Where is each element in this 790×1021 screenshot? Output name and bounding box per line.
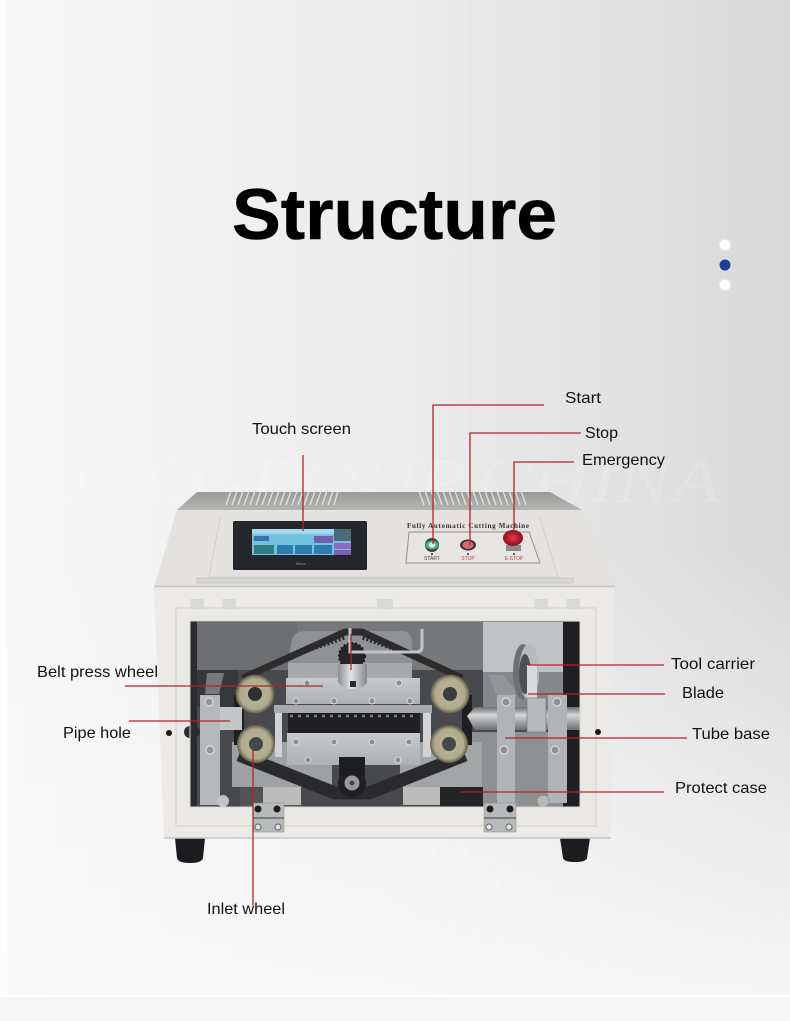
control panel: Fully Automatic Cutting Machine	[407, 522, 529, 530]
timing belt	[239, 632, 467, 793]
tool carrier, blade and tube base	[467, 644, 580, 807]
label: Inlet wheel: Inlet wheel	[207, 901, 285, 918]
line: blade	[528, 693, 665, 695]
line: touch screen	[302, 455, 304, 531]
label: Tool carrier: Tool carrier	[671, 656, 756, 673]
transparent window interior	[184, 621, 580, 807]
line: stop	[470, 433, 581, 545]
door screw holes	[166, 729, 601, 736]
line: emergency	[514, 462, 574, 532]
label: Protect case: Protect case	[675, 780, 767, 797]
machine front body	[154, 587, 615, 838]
touch screen: Kinco	[296, 561, 307, 566]
control panel	[406, 522, 540, 563]
label: Touch screen: Touch screen	[252, 421, 351, 438]
label: Belt press wheel: Belt press wheel	[37, 664, 158, 681]
line: belt press wheel	[125, 685, 323, 687]
line: tool carrier	[528, 664, 664, 666]
top pulley and hook	[338, 628, 422, 689]
label: Pipe hole: Pipe hole	[63, 725, 131, 742]
line: tube base	[505, 737, 687, 739]
door frame	[176, 608, 596, 826]
title: Structure	[232, 176, 557, 255]
machine feet	[175, 838, 590, 863]
label: Tube base: Tube base	[692, 726, 770, 743]
machine	[37, 390, 770, 918]
stop button: STOP	[461, 556, 475, 562]
line: inlet wheel	[252, 750, 254, 905]
bottom pulley	[338, 757, 366, 797]
pagination dots	[720, 240, 730, 290]
label: Stop: Stop	[585, 425, 618, 442]
line: pipe hole	[129, 720, 230, 722]
left hinge	[253, 803, 284, 832]
callout lines	[125, 405, 687, 905]
start button: START	[424, 556, 440, 562]
emergency stop button: E-STOP	[505, 556, 524, 562]
inlet wheels	[237, 725, 468, 763]
line: protect case	[461, 791, 664, 793]
label: Start: Start	[565, 390, 602, 407]
upper plate behind belt	[288, 631, 412, 679]
touch screen	[233, 521, 367, 570]
label: Emergency: Emergency	[582, 452, 665, 469]
left bracket and pipe hole	[184, 673, 242, 807]
label: Blade: Blade	[682, 685, 724, 702]
line: start	[433, 405, 544, 544]
cutter carriage plates	[274, 678, 432, 765]
watermark: L.Y.GROUP.CHINA	[65, 445, 722, 516]
belt press wheels	[236, 674, 470, 714]
machine top vent panel	[177, 491, 582, 510]
right hinge	[484, 803, 516, 832]
window frame inner edge	[190, 621, 580, 807]
line: top pulley	[350, 634, 352, 670]
machine control face	[154, 510, 615, 587]
